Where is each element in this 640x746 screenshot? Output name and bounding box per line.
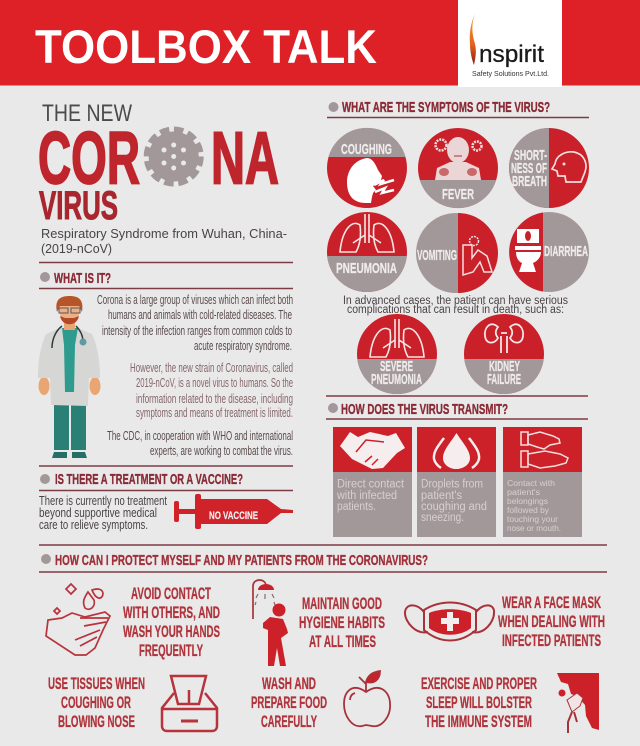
icon: virus	[147, 130, 201, 184]
text: avoid contact: WASH YOUR HANDS	[123, 623, 220, 641]
symptom: diarrhea: DIARRHEA	[544, 243, 588, 260]
card: belongings: patient's	[507, 488, 540, 497]
text: exercise: EXERCISE AND PROPER	[421, 675, 537, 693]
card: belongings: Contact with	[507, 479, 555, 488]
text: wash food	[251, 675, 327, 731]
symptom: vomiting: VOMITING	[417, 247, 457, 264]
text: exercise	[421, 675, 537, 731]
heading: protection	[41, 553, 428, 569]
NA: NA	[211, 116, 279, 200]
text block: advanced cases	[343, 295, 568, 316]
text block: advanced cases: In advanced cases, the patient can have serious	[343, 295, 568, 307]
text block: new strain: However, the new strain of Coronavirus, called	[130, 360, 293, 375]
logo: Inspirit: nspirit	[479, 41, 544, 68]
card: direct contact: with infected	[336, 490, 397, 502]
symptom: shortness of breath: SHORT-	[514, 147, 547, 164]
text block: no treatment: There is currently no treatment	[39, 494, 167, 508]
text: hygiene: HYGIENE HABITS	[299, 614, 385, 632]
panel: protection	[39, 553, 607, 733]
symptom: shortness of breath: NESS OF	[511, 160, 547, 177]
text block: new strain: symptoms and means of treatment is limited.	[136, 405, 293, 420]
heading: what is it	[40, 271, 111, 287]
text: exercise: SLEEP WILL BOLSTER	[426, 694, 532, 712]
symptom: vomiting	[416, 213, 498, 293]
text: wash food: PREPARE FOOD	[251, 694, 327, 712]
icon: washing hands	[46, 584, 110, 655]
panel: what is it	[38, 271, 293, 458]
complication: severe pneumonia	[357, 314, 437, 394]
text block: no treatment: care to relieve symptoms.	[39, 518, 148, 532]
text block: no treatment: beyond supportive medical	[39, 506, 157, 520]
VIRUS: VIRUS	[39, 184, 118, 228]
text: tissues	[48, 675, 145, 731]
text block: definition: intensity of the infection ranges from common colds to	[102, 323, 292, 338]
text block: new strain: information related to the disease, including	[136, 391, 293, 406]
card: droplets: patient's	[421, 490, 462, 502]
symptom: diarrhea	[509, 212, 589, 292]
text: tissues: COUGHING OR	[61, 694, 131, 712]
card: droplets: Droplets from	[421, 478, 483, 490]
heading: symptoms	[328, 100, 550, 116]
card: droplets: coughing and	[421, 501, 487, 513]
card: direct contact	[333, 427, 412, 537]
icon: doctor	[38, 296, 100, 458]
text: hygiene: MAINTAIN GOOD	[302, 595, 382, 613]
heading: what is it: WHAT IS IT?	[54, 271, 111, 287]
icon: tissue box	[162, 676, 217, 731]
text: avoid contact: FREQUENTLY	[139, 642, 203, 660]
text block: definition	[97, 292, 293, 353]
text: wash food: CAREFULLY	[261, 713, 317, 731]
title: TOOLBOX TALK	[35, 20, 377, 73]
text: tissues: USE TISSUES WHEN	[48, 675, 145, 693]
text block: CDC	[107, 428, 293, 458]
symptom: shortness of breath: BREATH	[512, 173, 547, 190]
card: belongings	[503, 427, 582, 537]
symptom: shortness of breath	[509, 128, 589, 208]
card: droplets: sneezing.	[421, 512, 464, 524]
complication: kidney failure: KIDNEY	[489, 358, 520, 375]
text: wash food: WASH AND	[262, 675, 316, 693]
text block: new strain	[130, 360, 293, 420]
heading: transmit: HOW DOES THE VIRUS TRANSMIT?	[341, 402, 508, 418]
icon: climber	[557, 673, 599, 733]
card: belongings: nose or mouth.	[507, 524, 561, 533]
card: direct contact: patients.	[337, 501, 376, 513]
symptom: pneumonia: PNEUMONIA	[336, 260, 397, 277]
text: avoid contact: WITH OTHERS, AND	[123, 604, 220, 622]
text: exercise: THE IMMUNE SYSTEM	[425, 713, 532, 731]
symptom: fever: FEVER	[442, 186, 474, 203]
text: tissues: BLOWING NOSE	[58, 713, 135, 731]
panel: transmission	[326, 402, 588, 537]
text block: no treatment	[39, 494, 167, 532]
heading: protection: HOW CAN I PROTECT MYSELF AND MY PATIENTS FROM THE CORONAVIRUS?	[55, 553, 428, 569]
text: avoid contact: AVOID CONTACT	[131, 585, 211, 603]
symptom: pneumonia	[327, 212, 407, 292]
logo: Inspirit: Safety Solutions Pvt.Ltd.	[472, 71, 549, 78]
heading: treatment	[40, 472, 243, 488]
panel: symptoms	[327, 100, 589, 394]
text block: advanced cases: complications that can result in death, such as:	[347, 304, 564, 316]
text: avoid contact	[123, 585, 220, 660]
complication: kidney failure: FAILURE	[487, 371, 521, 388]
heading: transmit	[328, 402, 508, 418]
text block: definition: acute respiratory syndrome.	[194, 338, 292, 353]
card: belongings: belongings	[507, 497, 548, 506]
card: direct contact: Direct contact	[337, 478, 405, 490]
heading: treatment: IS THERE A TREATMENT OR A VACCINE?	[55, 472, 243, 488]
icon: syringe	[174, 494, 293, 529]
text block: CDC: experts, are working to combat the virus.	[150, 443, 293, 458]
complication: kidney failure	[464, 314, 544, 394]
icon: shower person	[253, 580, 288, 666]
card: belongings: touching your	[507, 515, 558, 524]
symptom: coughing	[327, 128, 407, 208]
logo: Inspirit	[458, 0, 562, 87]
symptom: fever	[418, 128, 498, 208]
text block: new strain: 2019-nCoV, is a novel virus to humans. So the	[136, 375, 293, 390]
text: hygiene	[299, 595, 385, 651]
header banner	[0, 0, 640, 86]
COR: COR	[38, 116, 140, 200]
card: droplets	[417, 427, 496, 537]
text block: definition: Corona is a large group of viruses which can infect both	[97, 292, 293, 307]
text: hygiene: AT ALL TIMES	[309, 633, 376, 651]
text block: definition: humans and animals with cold-related diseases. The	[108, 307, 292, 322]
card: belongings: followed by	[507, 506, 549, 515]
main title block	[38, 100, 287, 256]
text: face mask	[498, 594, 605, 650]
complication: severe pneumonia: SEVERE	[380, 358, 413, 375]
panel: treatment or vaccine	[39, 472, 293, 532]
icon: apple	[344, 671, 390, 726]
icon: face mask	[405, 602, 494, 640]
main title block: (2019-nCoV)	[41, 242, 112, 256]
symptom: coughing: COUGHING	[341, 141, 392, 158]
The New: THE NEW	[42, 100, 132, 127]
icon: syringe: NO VACCINE	[209, 510, 258, 522]
complication: severe pneumonia: PNEUMONIA	[371, 371, 422, 388]
subtitle: Respiratory Syndrome from Wuhan, China-	[41, 227, 287, 241]
text block: CDC: The CDC, in cooperation with WHO and international	[107, 428, 293, 443]
